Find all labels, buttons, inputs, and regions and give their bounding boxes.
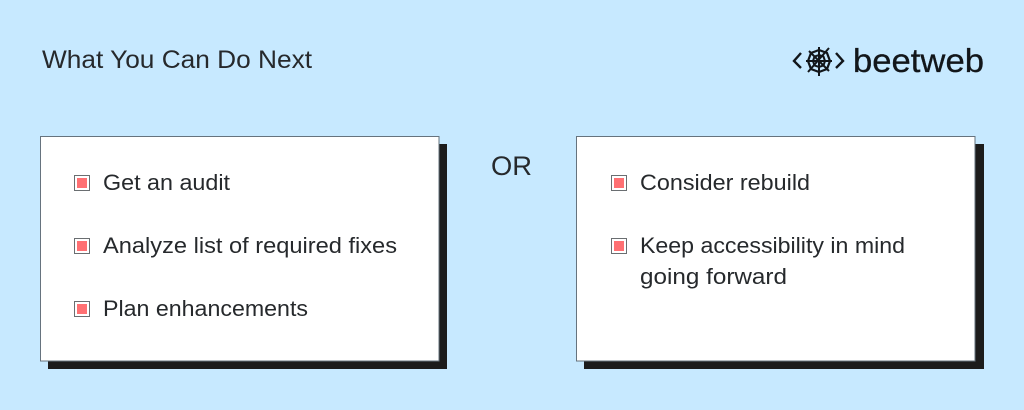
text: analyze list: Analyze list of required fixes <box>103 233 397 258</box>
panel shadow <box>584 144 984 369</box>
text: get an audit: Get an audit <box>103 170 230 195</box>
panel card <box>576 136 975 361</box>
bullet: keep accessibility <box>612 238 626 254</box>
or label: OR <box>491 151 532 181</box>
text: consider rebuild: Consider rebuild <box>640 170 810 195</box>
icon: web wheel with chevrons <box>794 47 843 76</box>
panel card <box>40 136 439 361</box>
text: keep accessibility: Keep accessibility in mind <box>640 233 905 258</box>
panel: left options <box>40 136 447 369</box>
text: keep accessibility <box>640 233 905 289</box>
text: plan enhancements: Plan enhancements <box>103 296 308 321</box>
title: What You Can Do Next <box>42 46 312 74</box>
logo: beetweb <box>794 42 984 79</box>
panel: right options <box>576 136 984 369</box>
bullet: consider rebuild <box>612 176 626 190</box>
panel shadow <box>48 144 447 369</box>
bullet: get an audit <box>74 176 90 190</box>
bullet: plan enhancements <box>74 302 90 316</box>
text: keep accessibility: going forward <box>640 264 787 289</box>
wordmark: beetweb <box>853 42 984 79</box>
bullet: analyze list <box>74 238 90 254</box>
